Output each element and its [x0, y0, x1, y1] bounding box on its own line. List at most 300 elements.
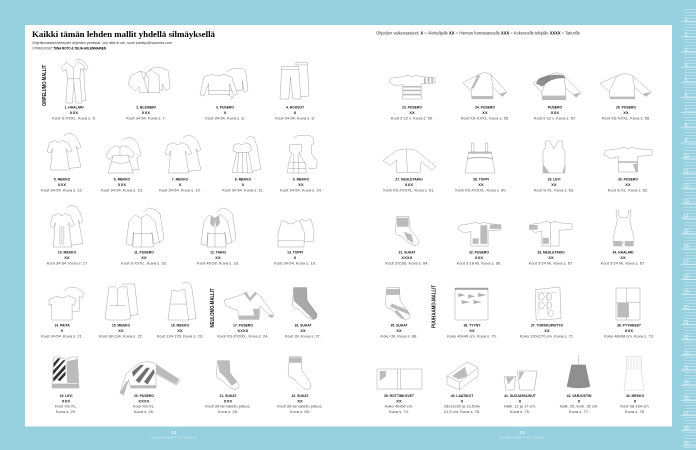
icon: dress [165, 135, 201, 173]
item 41 [504, 371, 537, 414]
caption 37 [520, 324, 574, 338]
caption 37: XX [544, 328, 550, 333]
caption 24: XX [482, 110, 488, 115]
icon: blazer [128, 67, 170, 93]
caption 19: Koot XS-XL. [55, 404, 77, 408]
icon: dress [50, 205, 83, 247]
caption 7: Koot 34-54. Kuva s. 10. [159, 188, 201, 192]
item 24 [461, 73, 509, 120]
caption 8: Koot 34-54. Kuva s. 11. [222, 188, 264, 192]
caption 16: XX [177, 328, 183, 333]
caption 17 [217, 324, 269, 338]
caption 14: X [61, 328, 64, 333]
index ruler: 26 [683, 396, 689, 402]
caption 28 [455, 178, 507, 192]
caption 27: Koot XS-XXXXL. Kuva s. 61. [383, 188, 435, 192]
caption 40: 21,5 cm. Kuva s. 75. [444, 409, 480, 414]
item 3 [200, 68, 248, 120]
item 26 [600, 74, 651, 120]
caption 13: Koot 34-54. Kuva s. 19. [274, 260, 316, 266]
index ruler: 23 [683, 350, 689, 356]
icon: t-shirt [49, 287, 84, 320]
caption 32: Koot 3-18 kk. Kuva s. 66. [457, 260, 501, 266]
intro text: Ohjetiedustelut/yhteydet ohjeiden perässä. Jos niitä ei ole, suuri kasityo@sanoma.com. [32, 41, 173, 45]
caption 40 [444, 394, 480, 414]
caption 38: XXX [625, 328, 633, 333]
caption 42: Halk. 25, kork. 35 cm. [560, 404, 598, 408]
caption 40: 40. LAATIKOT [451, 394, 474, 398]
index ruler: 2 [685, 32, 688, 38]
icon: frilled dress [288, 135, 317, 173]
caption 22: 22. SUKAT [291, 394, 309, 398]
caption 31: 31. SUKAT [398, 250, 416, 254]
caption 27: XXX [405, 182, 413, 187]
caption 3: X [224, 110, 227, 115]
caption 25: Koot 2-12 v. Kuva s. 57. [534, 116, 576, 120]
caption 19: XXX [62, 398, 70, 404]
caption 25 [534, 106, 576, 120]
caption 22 [277, 394, 323, 414]
caption 29 [534, 178, 574, 192]
caption 35: XX [396, 328, 402, 333]
caption 9: XX [298, 182, 304, 187]
index ruler: 16 [683, 244, 689, 250]
caption 15: XX [118, 328, 124, 333]
caption 27 [383, 178, 435, 192]
right footer: SUURI KÄSITYÖ 4/2021 [499, 436, 545, 440]
caption 34: 34. HAALARI [613, 250, 634, 254]
caption 4: Koot 34-54. Kuva s. 8. [275, 116, 315, 120]
caption 35: 35. SUKAT [390, 324, 408, 328]
caption 14: Koot 34-54. Kuva s. 21. [41, 334, 83, 338]
caption 22: Kuva s. 55. [290, 409, 310, 414]
item 43 [620, 357, 650, 414]
section label: ompelumo-mallit: OMPELUMO-MALLIT [42, 65, 48, 106]
index ruler: 24 [683, 365, 689, 371]
caption 6 [101, 178, 143, 192]
caption 34 [601, 250, 645, 266]
caption 26 [602, 106, 650, 120]
section label: neulomo-mallit: NEULOMO-MALLIT [210, 288, 216, 328]
icon: patterned yoke sweater [533, 73, 581, 100]
item 23 [389, 75, 435, 120]
caption 1 [52, 106, 96, 120]
caption 2: XXX [142, 110, 150, 115]
caption 43: 43. MEKKO [626, 394, 644, 398]
caption 25: PUSERO [548, 106, 563, 110]
caption 7: X [179, 182, 182, 187]
item 18 [285, 288, 321, 338]
caption 38 [604, 324, 654, 338]
caption 8 [222, 178, 264, 192]
caption 33: Koot 3-24 kk. Kuva s. 67. [529, 260, 573, 266]
item 22 [277, 357, 323, 414]
caption 20 [133, 394, 155, 414]
index ruler: 19 [683, 290, 689, 296]
index ruler: 20 [683, 305, 689, 311]
caption 39: XX [396, 398, 402, 404]
item 32 [457, 222, 501, 266]
item 8 [222, 136, 264, 192]
item 11 [121, 208, 167, 266]
caption 17: 17. PUSERO [233, 324, 253, 328]
caption 1: 1. HAALARI [64, 106, 84, 110]
caption 23: Koot 2-12 v. Kuva s. 59. [391, 116, 433, 120]
caption 6: XXX [118, 182, 126, 187]
item 42 [560, 355, 598, 414]
caption 29: 29. LIIVI [548, 178, 560, 182]
icon: baby sweater [458, 222, 501, 246]
caption 5: 5. MEKKO [54, 178, 71, 182]
caption 26: 26. PUSERO [616, 106, 636, 110]
caption 41: Kuva s. 75. [510, 409, 530, 414]
caption 18 [285, 324, 321, 338]
caption 34: Koot 3-24 kk. Kuva s. 67. [601, 260, 645, 266]
icon: pleated dress [232, 136, 261, 173]
caption 5 [41, 178, 83, 192]
item 12 [197, 208, 239, 266]
caption 2: Koot 34-54. Kuva s. 7. [126, 116, 166, 120]
caption 39: 39. ROTTINKOVET [384, 394, 415, 398]
caption 10 [47, 250, 88, 266]
item 27 [383, 149, 436, 192]
caption 5: XXX [58, 182, 66, 187]
index ruler: 6 [685, 93, 688, 99]
icon: baby cardigan [529, 221, 572, 246]
caption 15: 15. MEKKO [112, 324, 130, 328]
index ruler: 27 [683, 411, 689, 417]
caption 1: XXX [70, 110, 78, 115]
item 25 [533, 73, 581, 120]
icon: cushion [455, 288, 488, 320]
icon: child dress [168, 282, 196, 320]
index ruler: 12 [683, 184, 689, 190]
caption 19 [55, 394, 77, 414]
caption 5: Koot 34-54. Kuva s. 12. [41, 188, 83, 192]
caption 10: 10. MEKKO [58, 250, 76, 254]
caption 23: XX [409, 110, 415, 115]
item 15 [99, 284, 143, 338]
caption 20: Koot XS-XL. [133, 404, 155, 408]
icon: zebra vest [52, 357, 79, 388]
credits: // PIIRROKSET TIINA ROTO & TEIJA HOLENMAINEN [32, 46, 106, 50]
caption 30: 30. PUSERO [618, 178, 638, 182]
caption 42: X [578, 398, 581, 404]
caption 24: Koot XS-XXXL. Kuva s. 56. [461, 116, 509, 120]
index ruler [681, 7, 696, 450]
right footer [499, 430, 545, 440]
icon: sweater [604, 147, 652, 172]
index ruler: 11 [683, 168, 689, 174]
caption 32 [457, 250, 501, 266]
caption 40: X [461, 398, 464, 404]
caption 17: XXXX [237, 328, 249, 333]
caption 38: 38. PYYHKEET [617, 324, 642, 328]
icon: sock [288, 357, 311, 389]
caption 11: 11. PUSERO [134, 250, 154, 254]
caption 33: XX [548, 255, 554, 260]
icon: strap top [465, 143, 495, 173]
caption 9 [280, 178, 322, 192]
item 16 [157, 282, 203, 338]
icon: fringe dress [624, 357, 644, 390]
index ruler: 14 [683, 214, 689, 220]
index ruler: 8 [685, 123, 688, 129]
caption 27: 27. NEULETAKKI [395, 178, 423, 182]
index ruler: 7 [685, 108, 688, 114]
icon: raglan sweater [600, 74, 651, 99]
caption 15: Koot 98-134. Kuva s. 22. [99, 334, 143, 338]
caption 21 [205, 394, 251, 414]
index ruler: 1 [685, 17, 688, 23]
index ruler: 15 [683, 229, 689, 235]
caption 21: Koot 39 tai haluttu pituus. [205, 404, 251, 408]
caption 9: Koot 34-54. Kuva s. 14. [280, 188, 322, 192]
icon: jacket [201, 208, 236, 247]
index ruler: 9 [685, 138, 688, 144]
caption 39: Kuva s. 74. [389, 409, 409, 414]
item 7 [159, 135, 201, 192]
icon: striped sock [385, 288, 410, 319]
caption 36 [447, 324, 497, 338]
caption 4 [275, 106, 315, 120]
caption 41: 41. SUOJARUUKUT [504, 394, 537, 398]
caption 40: 18x11x30 ja 13,5x9x [444, 404, 480, 408]
icon: patterned sock [395, 217, 419, 245]
icon: trousers [280, 62, 309, 99]
caption 16: 16. MEKKO [171, 324, 189, 328]
caption 21: 21. SUKAT [219, 394, 237, 398]
caption 41 [504, 394, 537, 414]
caption 31: XXXX [401, 255, 413, 260]
caption 36: XX [469, 328, 475, 333]
index ruler: 21 [683, 320, 689, 326]
caption 37: Koko 120x170 cm. Kuva s. 71. [520, 334, 574, 338]
caption 22: XX [297, 398, 303, 404]
caption 18: 18. SUKAT [294, 324, 312, 328]
item 1 [52, 59, 96, 120]
caption 19: Kuva s. 29. [56, 409, 76, 414]
caption 8: X [242, 182, 245, 187]
icon: rattan doors [377, 369, 422, 389]
caption 33: 33. NEULETAKKI [537, 250, 565, 254]
caption 20: XXXX [138, 398, 150, 404]
caption 39 [384, 394, 415, 414]
item 19 [52, 357, 79, 414]
index ruler: 4 [685, 62, 688, 68]
caption 7: 7. MEKKO [172, 178, 189, 182]
caption 12 [197, 250, 239, 266]
index ruler: 25 [683, 381, 689, 387]
caption 43 [620, 394, 650, 414]
item 35 [381, 288, 417, 338]
caption 2 [126, 106, 166, 120]
caption 1: Koot S-XXXL. Kuva s. 6. [52, 116, 96, 120]
caption 25: XXX [551, 110, 559, 115]
item 36 [447, 288, 497, 338]
left footer: SUURI KÄSITYÖ 4/2021 [151, 436, 197, 440]
caption 22: Koot 39 tai haluttu pituus. [277, 404, 323, 408]
icon: pinafore dress [105, 284, 138, 320]
item 33 [529, 221, 573, 266]
caption 2: 2. BLEISERI [136, 106, 156, 110]
caption 12: 12. TAKKI [210, 250, 226, 254]
caption 30: XX [625, 182, 631, 187]
icon: dress [47, 133, 81, 170]
caption 18: XX [300, 328, 306, 333]
caption 30: Koot S-XL. Kuva s. 62. [608, 188, 648, 192]
caption 35 [381, 324, 417, 338]
caption 14 [41, 324, 83, 338]
caption 3 [205, 106, 245, 120]
icon: lampshade [567, 355, 590, 388]
index ruler: 18 [683, 274, 689, 280]
index ruler: 10 [683, 153, 689, 159]
item 6 [101, 137, 143, 192]
item 34 [601, 210, 645, 266]
caption 6: 6. MEKKO [114, 178, 131, 182]
caption 18: Koot 39. Kuva s. 27. [285, 334, 321, 338]
icon: pot covers [504, 371, 537, 390]
icon: striped sock [292, 288, 317, 319]
index ruler: 29 [683, 441, 689, 447]
item 28 [455, 143, 507, 192]
caption 43: Kuva s. 78. [625, 409, 645, 414]
caption 11 [121, 250, 167, 266]
icon: cardigan [383, 149, 436, 172]
item 17 [217, 292, 274, 338]
title: Kaikki tämän lehden mallit yhdellä silmäyksellä [32, 29, 216, 39]
left footer [151, 430, 197, 440]
index ruler: 28 [683, 426, 689, 432]
icon: boxes [447, 362, 478, 390]
caption 12: XX [215, 255, 221, 260]
index ruler: 17 [683, 259, 689, 265]
left footer: 12 [172, 430, 177, 435]
caption 37: 37. TORKKUPEITTO [531, 324, 564, 328]
caption 16 [157, 324, 203, 338]
caption 24 [461, 106, 509, 120]
item 20 [120, 362, 180, 414]
caption 10: XX [64, 255, 70, 260]
caption 31 [385, 250, 429, 266]
caption 43: Koot 98-164 cm. [620, 404, 650, 408]
caption 12: Koot 46-58. Kuva s. 18. [197, 260, 239, 266]
caption 16: Koot 134-176. Kuva s. 23. [157, 334, 203, 338]
caption 33 [529, 250, 573, 266]
icon: sweater [200, 68, 248, 99]
icon: patterned sock [216, 361, 239, 389]
icon: baby overalls [613, 210, 634, 246]
caption 32: 32. PUSERO [469, 250, 489, 254]
item 39 [377, 369, 422, 414]
item 9 [280, 135, 322, 192]
item 2 [126, 67, 170, 120]
caption 28: Koot XS-XXXXL. Kuva s. 60. [455, 188, 507, 192]
caption 3: 3. PUSERO [216, 106, 234, 110]
caption 10: Koot 34-54. Kuva s. 17 [47, 260, 88, 266]
icon: towels [616, 288, 640, 320]
index ruler: 13 [683, 199, 689, 205]
caption 34: XX [620, 255, 626, 260]
caption 28: 28. TOPPI [473, 178, 489, 182]
caption 41: X [519, 398, 522, 404]
caption 21: XXX [224, 398, 232, 404]
item 10 [47, 205, 88, 266]
icon: vest [543, 141, 565, 173]
caption 15 [99, 324, 143, 338]
caption 29: XX [551, 182, 557, 187]
caption 11: Koot S-XXXL. Kuva s. 16. [121, 260, 167, 266]
index ruler: 22 [683, 335, 689, 341]
right footer: 13 [520, 430, 525, 435]
caption 26: XX [623, 110, 629, 115]
item 31 [385, 217, 429, 266]
caption 29: Koot S-XL. Kuva s. 63. [534, 188, 574, 192]
item 21 [205, 361, 251, 414]
caption 35: Koko 39. Kuva s. 68. [381, 334, 417, 338]
caption 24: 24. PUSERO [475, 106, 495, 110]
caption 26: Koot XS-XXXL. Kuva s. 58. [602, 116, 650, 120]
caption 42 [560, 394, 598, 414]
caption 7 [159, 178, 201, 192]
caption 41: Halk. 12 ja 17 cm. [504, 404, 536, 408]
caption 20: Kuva s. 26. [134, 409, 154, 414]
caption 13 [274, 250, 316, 266]
section label: puuhaamo-mallit: PUUHAAMO-MALLIT [432, 285, 438, 328]
caption 42: 42. VARJOSTIN [567, 394, 592, 398]
caption 23 [391, 106, 433, 120]
caption 3: Koot 34-54. Kuva s. 8. [205, 116, 245, 120]
item 29 [534, 141, 574, 192]
icon: v-neck sweater [224, 292, 274, 319]
caption 14: 14. PAITA [54, 324, 70, 328]
index ruler: 3 [685, 47, 688, 53]
caption 39: Koko 40x50 cm. [385, 404, 413, 408]
caption 21: Kuva s. 28. [218, 409, 238, 414]
caption 11: XX [141, 255, 147, 260]
caption 4: 4. HOUSUT [286, 106, 305, 110]
caption 31: Koot 37(39). Kuva s. 64. [385, 260, 429, 266]
icon: blanket [535, 287, 561, 320]
caption 13: 13. TOPPI [287, 250, 303, 254]
index ruler: 5 [685, 78, 688, 84]
icon: blouse [126, 208, 164, 247]
caption 42: Kuva s. 77. [569, 409, 589, 414]
caption 23: 23. PUSERO [402, 106, 422, 110]
icon: sports top [278, 219, 314, 247]
item 40 [444, 362, 480, 414]
caption 38: Koko 48x68 cm. Kuva s. 73. [604, 334, 654, 338]
item 14 [41, 287, 84, 338]
item 38 [604, 288, 654, 338]
caption 36: Koko 40x40 cm. Kuva s. 70. [447, 334, 497, 338]
caption 9: 9. MEKKO [293, 178, 310, 182]
item 37 [520, 287, 574, 338]
caption 28: XX [478, 182, 484, 187]
caption 8: 8. MEKKO [235, 178, 252, 182]
icon: zebra sweater [120, 362, 180, 395]
caption 13: X [294, 255, 297, 260]
difficulty legend: Ohjeiden vaikeusasteet: X = Aloittelijalle XX = Hieman harrastaneelle XXX = Kokeneelle tekijälle XXXX = Taiturille [376, 30, 581, 36]
item 30 [604, 147, 652, 192]
item 13 [274, 219, 316, 266]
caption 32: XXX [475, 255, 483, 260]
icon: raglan sweater [463, 73, 507, 99]
item 4 [275, 62, 315, 120]
icon: striped sweater [389, 75, 435, 99]
caption 30 [608, 178, 648, 192]
